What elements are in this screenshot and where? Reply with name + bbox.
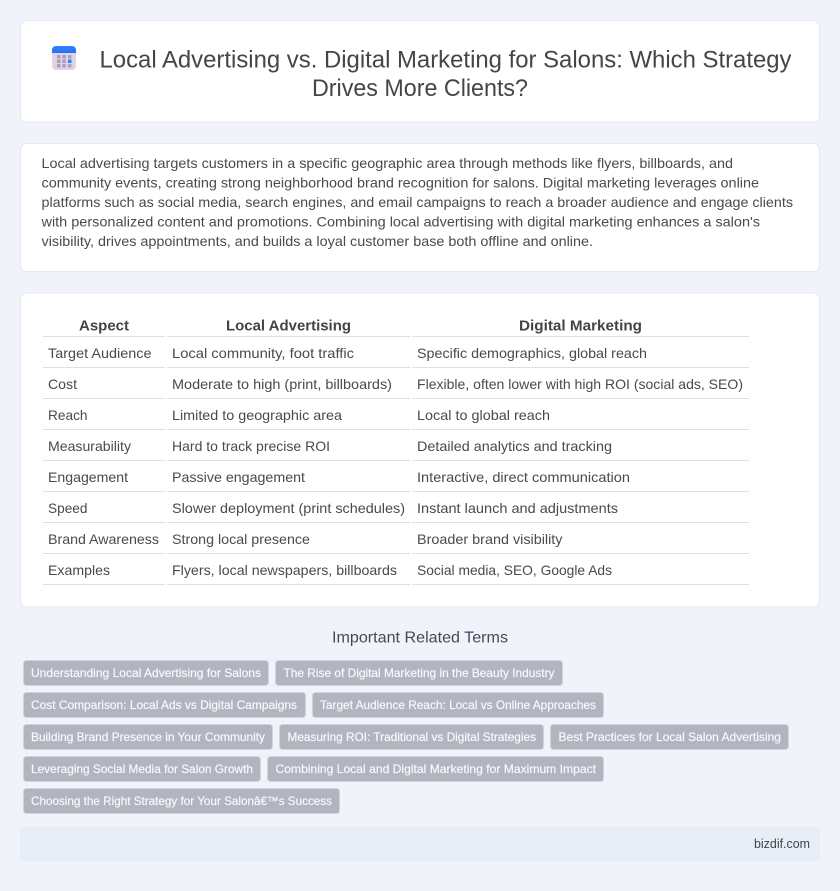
tag bbox=[268, 756, 604, 782]
text block: description: platforms such as social media, search engines, and email campaigns to reach a broader audience and engage clients bbox=[42, 194, 793, 210]
panel: comparison table bbox=[20, 293, 820, 607]
row: speed: Slower deployment (print schedules) bbox=[172, 500, 405, 516]
row: reach: Local to global reach bbox=[417, 407, 550, 423]
tag: The Rise of Digital Marketing in the Beauty Industry bbox=[284, 666, 554, 680]
table header: Digital Marketing bbox=[519, 318, 642, 334]
row: examples: Social media, SEO, Google Ads bbox=[417, 562, 612, 578]
row: speed: Speed bbox=[48, 500, 88, 516]
panel: intro text bbox=[20, 144, 820, 272]
row: measurability bbox=[48, 438, 612, 454]
row: target audience bbox=[48, 345, 647, 361]
text block: description: visibility, drives appointments, and builds a loyal customer base both offline and online. bbox=[42, 233, 593, 249]
row: examples: Examples bbox=[48, 562, 110, 578]
row: brand awareness: Broader brand visibility bbox=[417, 531, 562, 547]
title bbox=[100, 46, 792, 102]
row: brand awareness: Strong local presence bbox=[172, 531, 310, 547]
tag bbox=[276, 660, 562, 686]
tag: Combining Local and Digital Marketing for Maximum Impact bbox=[276, 762, 597, 776]
tag bbox=[24, 788, 340, 814]
text block: description: with personalized content and promotions. Combining local advertising with digital marketing enhances a salon's bbox=[40, 214, 760, 230]
heading: important related terms: Important Related Terms bbox=[332, 630, 508, 646]
panel: related term tags bbox=[24, 660, 788, 814]
row: engagement: Interactive, direct communication bbox=[417, 469, 630, 485]
row: target audience: Target Audience bbox=[48, 345, 152, 361]
row: cost: Moderate to high (print, billboards) bbox=[172, 376, 392, 392]
text block: description bbox=[40, 155, 793, 249]
row: target audience: Local community, foot traffic bbox=[172, 345, 354, 361]
tag bbox=[24, 756, 260, 782]
table header: Local Advertising bbox=[226, 318, 351, 334]
tag bbox=[280, 724, 544, 750]
row: measurability: Detailed analytics and tracking bbox=[417, 438, 612, 454]
tag bbox=[24, 724, 272, 750]
tag: Target Audience Reach: Local vs Online Approaches bbox=[320, 698, 596, 712]
row: cost: Cost bbox=[48, 376, 77, 392]
tag bbox=[24, 660, 268, 686]
icon: calendar bbox=[52, 46, 76, 70]
row: reach bbox=[48, 407, 550, 423]
footer bbox=[20, 827, 820, 861]
row: brand awareness: Brand Awareness bbox=[48, 531, 159, 547]
text block: description: Local advertising targets customers in a specific geographic area through methods like flyers, billboards, and bbox=[42, 155, 733, 171]
tag bbox=[24, 692, 306, 718]
table header bbox=[79, 318, 642, 334]
row: cost: Flexible, often lower with high ROI (social ads, SEO) bbox=[417, 376, 743, 392]
tag: Measuring ROI: Traditional vs Digital Strategies bbox=[288, 730, 536, 744]
tag bbox=[312, 692, 604, 718]
row: reach: Reach bbox=[48, 407, 88, 423]
panel: header bbox=[20, 20, 820, 122]
row: reach: Limited to geographic area bbox=[172, 407, 342, 423]
tag: Leveraging Social Media for Salon Growth bbox=[31, 762, 253, 776]
footer source text: bizdif.com bbox=[754, 837, 810, 851]
row: engagement: Engagement bbox=[48, 469, 128, 485]
row: cost bbox=[48, 376, 743, 392]
tag: Best Practices for Local Salon Advertising bbox=[558, 730, 781, 744]
row: brand awareness bbox=[48, 531, 562, 547]
title: Drives More Clients? bbox=[312, 75, 528, 102]
tag: Cost Comparison: Local Ads vs Digital Campaigns bbox=[31, 698, 297, 712]
row: speed: Instant launch and adjustments bbox=[417, 500, 618, 516]
row: examples: Flyers, local newspapers, billboards bbox=[172, 562, 397, 578]
tag: Building Brand Presence in Your Community bbox=[31, 730, 265, 744]
row: measurability: Hard to track precise ROI bbox=[172, 438, 330, 454]
row: examples bbox=[48, 562, 612, 578]
row: engagement bbox=[48, 469, 630, 485]
tag bbox=[550, 724, 788, 750]
row: target audience: Specific demographics, global reach bbox=[417, 345, 647, 361]
row: speed bbox=[48, 500, 618, 516]
text block: description: community events, creating strong neighborhood brand recognition for salons. Digital marketing leverages online bbox=[42, 174, 759, 190]
tag: Understanding Local Advertising for Salons bbox=[31, 666, 261, 680]
table header: Aspect bbox=[79, 318, 129, 334]
tag: Choosing the Right Strategy for Your Salonâ€™s Success bbox=[31, 794, 332, 808]
row: engagement: Passive engagement bbox=[172, 469, 305, 485]
row: measurability: Measurability bbox=[48, 438, 131, 454]
title: Local Advertising vs. Digital Marketing for Salons: Which Strategy bbox=[100, 46, 792, 74]
